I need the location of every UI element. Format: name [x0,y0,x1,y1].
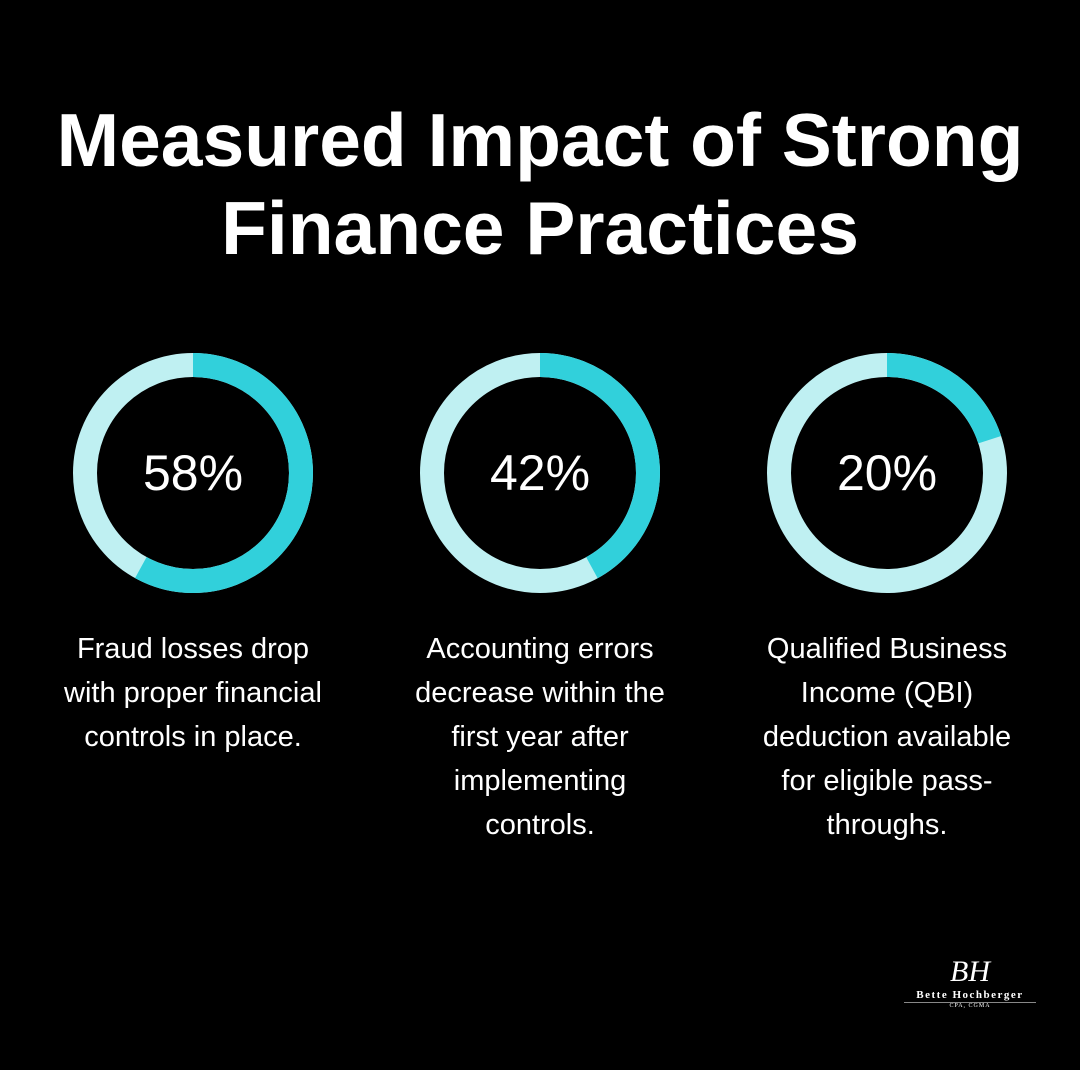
description: controls. [485,809,595,841]
donut chart 20% [767,353,1007,593]
description: first year after [451,721,629,753]
panel: QBI deduction [763,353,1011,841]
logo: BH [950,955,990,988]
description: throughs. [827,809,947,841]
logo: CPA, CGMA [949,1003,991,1009]
description: for eligible pass- [781,765,993,797]
description: Fraud losses drop [77,633,309,665]
description: Accounting errors [426,633,654,665]
description: controls in place. [84,721,302,753]
title [57,98,1023,270]
description: Income (QBI) [801,677,973,709]
description: implementing [454,765,626,797]
donut chart 58% [73,353,313,593]
logo: Bette Hochberger [916,989,1024,1001]
description: Qualified Business [767,633,1007,665]
description [64,633,322,753]
panel: accounting errors [415,353,665,841]
logo [904,955,1036,1009]
description: decrease within the [415,677,665,709]
donut chart 42%: 42% [490,445,590,501]
donut chart 58%: 58% [143,445,243,501]
title: Measured Impact of Strong [57,98,1023,182]
description: deduction available [763,721,1011,753]
description [415,633,665,841]
description [763,633,1011,841]
description: with proper financial [64,677,322,709]
title: Finance Practices [221,186,859,270]
donut chart 42% [420,353,660,593]
donut chart 20%: 20% [837,445,937,501]
panel: fraud losses [64,353,322,753]
